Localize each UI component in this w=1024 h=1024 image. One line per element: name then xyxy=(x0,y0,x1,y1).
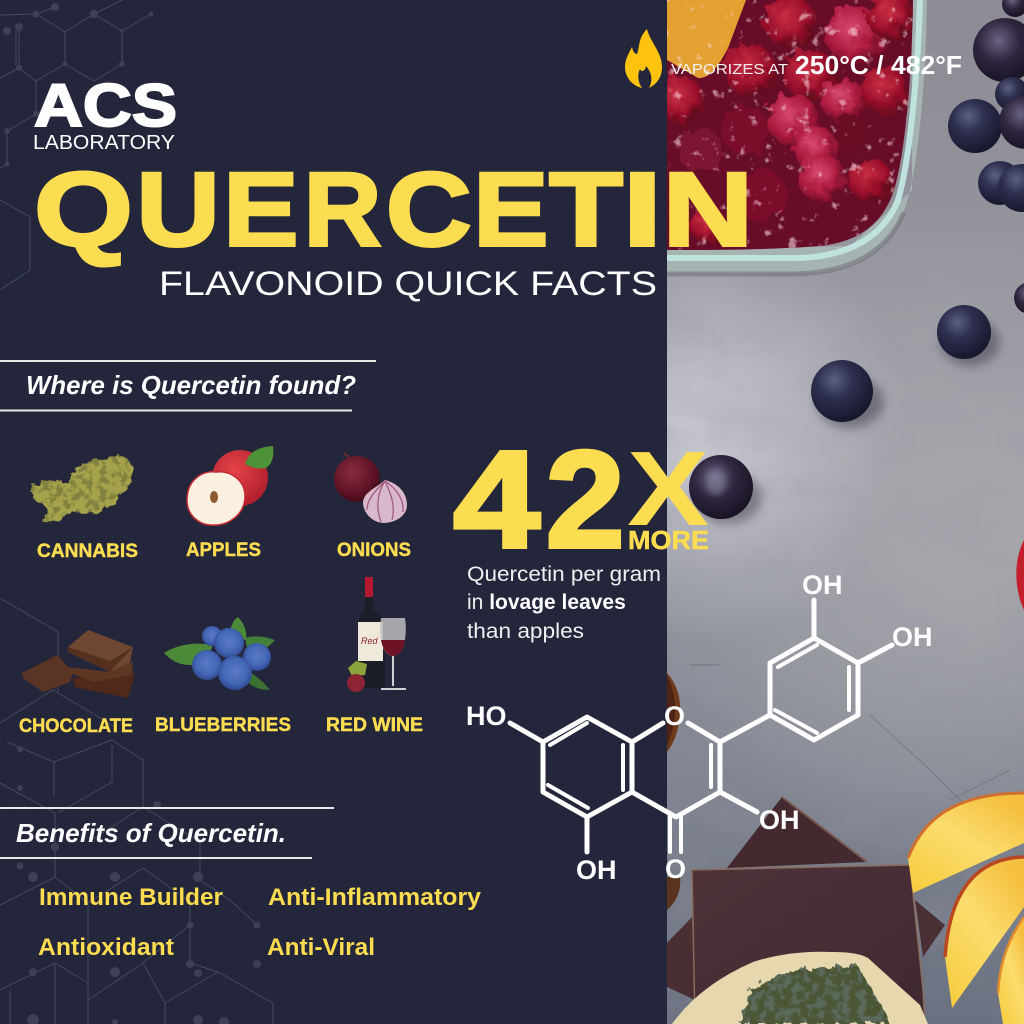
chemical structure: quercetin molecule: O xyxy=(665,854,686,884)
stat description: than apples xyxy=(467,620,584,643)
source: onions: ONIONS xyxy=(337,540,411,561)
benefits list xyxy=(38,884,482,961)
stat: 42X more: X xyxy=(627,430,709,548)
food sources grid xyxy=(19,446,423,737)
photo: red fruit edge xyxy=(1016,540,1024,610)
title: Quercetin: I xyxy=(622,152,662,268)
icon: flame xyxy=(625,29,662,88)
heading: benefits: Benefits of Quercetin. xyxy=(16,818,286,848)
chemical structure: quercetin molecule xyxy=(466,570,932,885)
source: onions xyxy=(334,453,411,561)
title: Quercetin: T xyxy=(549,152,623,268)
source: red wine: RED WINE xyxy=(326,715,423,736)
stat: 42X more xyxy=(453,423,709,577)
stat: 42X more: 2 xyxy=(546,423,625,577)
benefits list: Anti-Inflammatory xyxy=(268,884,482,911)
title: Quercetin: N xyxy=(663,152,753,268)
title: Quercetin: E xyxy=(223,152,298,268)
photo: grapes xyxy=(689,0,1024,524)
heading: where found: Where is Quercetin found? xyxy=(26,370,356,400)
title: Quercetin: U xyxy=(136,152,220,268)
chemical structure: quercetin molecule: OH xyxy=(576,855,616,885)
stat: 42X more: 4 xyxy=(453,423,540,577)
benefits list: Anti-Viral xyxy=(267,934,375,961)
title: Quercetin xyxy=(34,152,753,268)
benefits list: Immune Builder xyxy=(39,884,223,911)
title: Quercetin: C xyxy=(386,152,472,268)
chemical structure: quercetin molecule: HO xyxy=(466,701,506,731)
source: red wine: Red xyxy=(361,636,379,646)
benefits list: Antioxidant xyxy=(38,934,174,961)
logo: ACS Laboratory: LABORATORY xyxy=(33,131,175,154)
source: cannabis: CANNABIS xyxy=(37,541,138,562)
stat description: in lovage leaves xyxy=(467,591,626,614)
stat: 42X more: MORE xyxy=(628,525,709,555)
source: apples xyxy=(186,446,273,561)
title: Quercetin: R xyxy=(304,152,381,268)
photo: dark chocolate xyxy=(667,797,945,1024)
logo: ACS Laboratory: ACS xyxy=(34,72,177,139)
chemical structure: quercetin molecule: OH xyxy=(759,805,800,835)
photo: tea leaves on dish xyxy=(672,952,928,1024)
panel: dark background xyxy=(0,0,667,1024)
subtitle: FLAVONOID QUICK FACTS xyxy=(159,265,657,303)
stat description: Quercetin per gram xyxy=(467,563,661,586)
source: apples: APPLES xyxy=(186,540,261,561)
source: blueberries xyxy=(155,617,291,736)
source: chocolate xyxy=(19,630,135,737)
decorative hexagon molecule pattern xyxy=(0,0,273,1024)
source: blueberries: BLUEBERRIES xyxy=(155,715,291,736)
source: chocolate: CHOCOLATE xyxy=(19,716,133,737)
vaporization callout: VAPORIZES AT xyxy=(671,61,788,78)
vaporization callout xyxy=(625,29,962,88)
source: red wine xyxy=(326,577,423,736)
chemical structure: quercetin molecule: OH xyxy=(802,570,842,600)
title: Quercetin: Q xyxy=(34,152,133,268)
chemical structure: quercetin molecule: O xyxy=(664,701,685,731)
photo: tray of raspberries xyxy=(656,0,927,274)
photo: apple slices at panel edge xyxy=(667,673,680,910)
chemical structure: quercetin molecule: OH xyxy=(892,622,932,652)
title: Quercetin: E xyxy=(473,152,548,268)
stat description xyxy=(467,563,661,643)
photo: peach slices xyxy=(908,793,1024,1024)
source: cannabis xyxy=(32,456,138,562)
vaporization callout: 250°C / 482°F xyxy=(795,50,962,80)
panel: photo background xyxy=(656,0,1024,1024)
